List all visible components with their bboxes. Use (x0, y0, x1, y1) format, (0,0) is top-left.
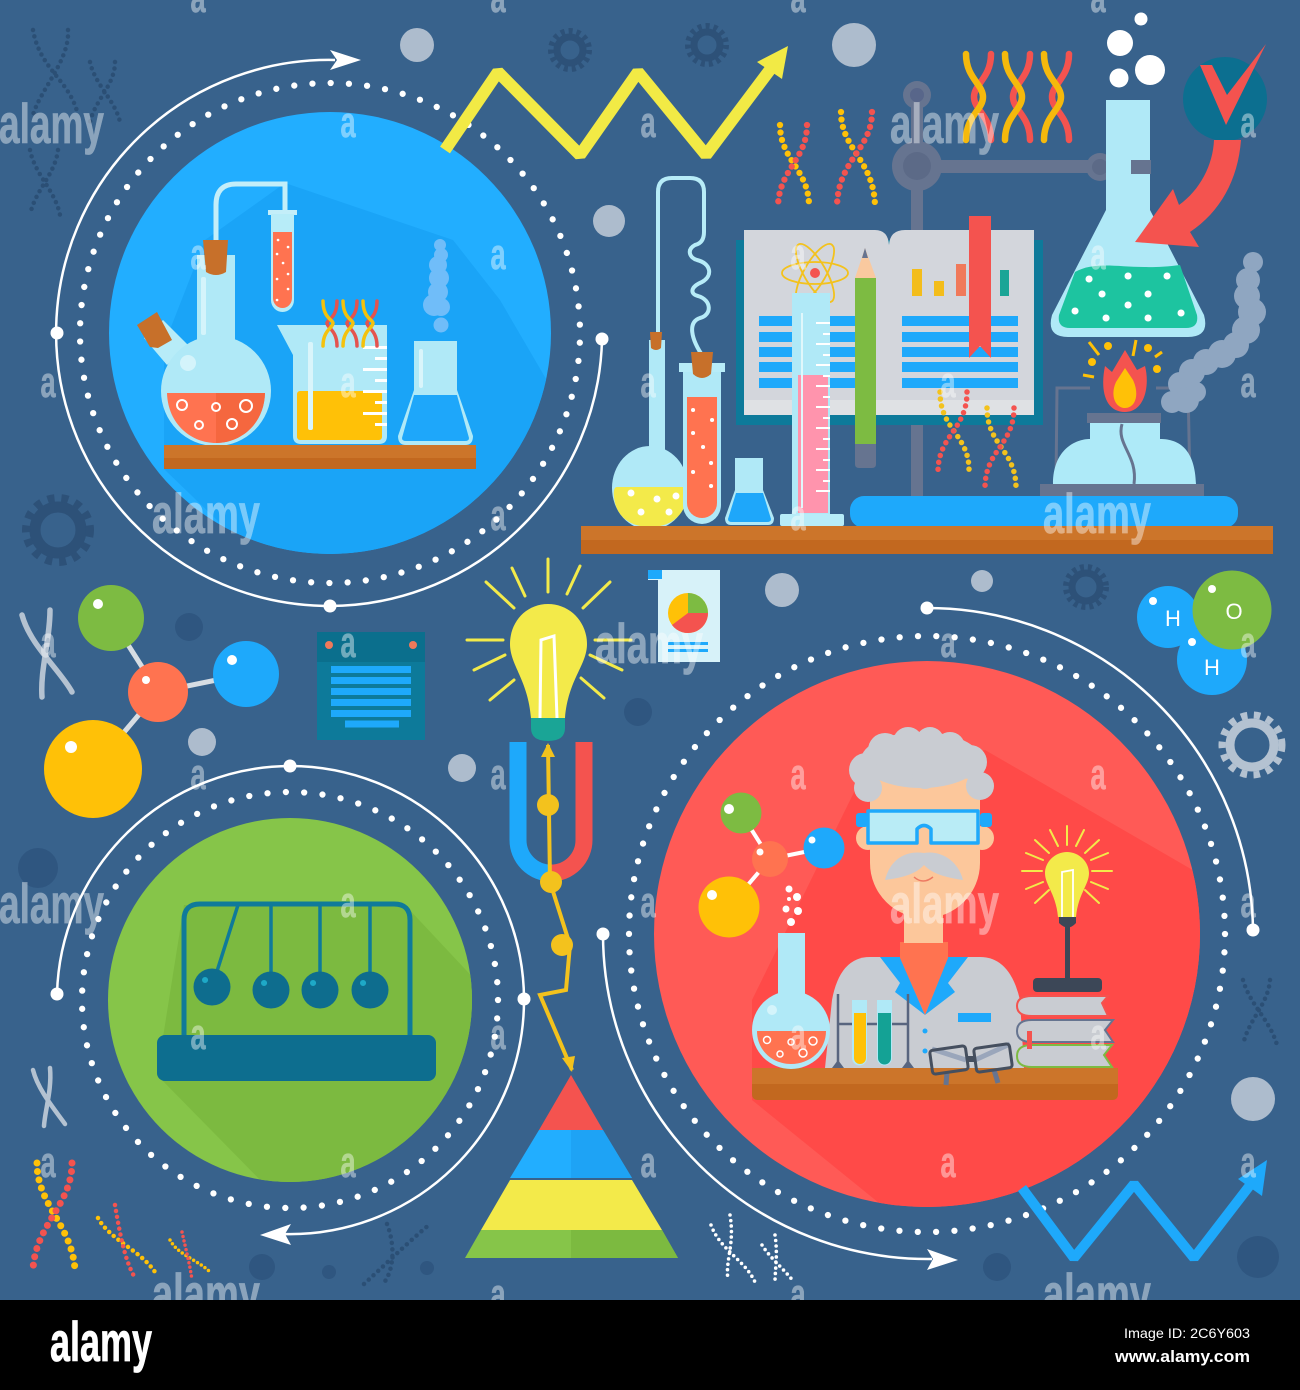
large watermarks: alamy (152, 1262, 260, 1325)
large watermarks: alamy (152, 482, 260, 545)
DNA coloured bottom-left (33, 1163, 210, 1280)
website: www.alamy.com (1114, 1347, 1250, 1366)
small watermark letters: aaaaa (40, 1137, 1256, 1187)
molecule (44, 585, 279, 818)
moustache (885, 852, 963, 880)
small watermark letters: aaaa (191, 749, 1106, 799)
small watermark letters: aaa (341, 877, 1256, 927)
DNA coloured top centre (778, 112, 875, 208)
arrowhead (330, 50, 361, 70)
large watermarks: alamy (0, 872, 104, 935)
desk lamp bulb (1022, 826, 1112, 992)
H2O molecule (1137, 570, 1272, 695)
neck (904, 900, 943, 943)
small watermark letters: aaaa (191, 1009, 1106, 1059)
big flask (1051, 100, 1205, 337)
small watermark letters: aaaa (40, 617, 1256, 667)
round flask (752, 886, 830, 1069)
panel: green circle (50, 760, 530, 1245)
test tube (268, 210, 297, 312)
small molecule (698, 792, 844, 938)
hair (849, 727, 994, 802)
small watermark letters: aa (490, 490, 806, 540)
arrowhead (260, 1224, 291, 1245)
long shelf (581, 496, 1273, 554)
page bar chart (912, 264, 1009, 296)
red curved arrow (1135, 140, 1241, 247)
large watermarks (0, 92, 1151, 1325)
footer logo: alamy (50, 1310, 152, 1373)
small flask (725, 458, 774, 525)
large watermarks: alamy (595, 612, 703, 675)
flask with side arm (137, 240, 271, 446)
chromosome ribbons top right (966, 54, 1069, 140)
note board (317, 632, 425, 740)
smoke (423, 239, 450, 332)
desk (752, 1068, 1118, 1100)
stack of books (1017, 996, 1113, 1067)
large watermarks: alamy (1043, 1262, 1151, 1325)
test tube rack (832, 994, 914, 1068)
atom (782, 239, 848, 307)
burner (1040, 388, 1204, 496)
text lines right page (902, 321, 1018, 383)
DNA on book (938, 392, 1016, 488)
tall test tube (679, 352, 725, 524)
bubbles (1107, 12, 1165, 88)
dark gears (26, 26, 1106, 607)
lab coat (825, 957, 1024, 1068)
yellow zigzag arrow (445, 46, 788, 155)
image id: Image ID: 2C6Y603 (1124, 1325, 1250, 1341)
Newton's cradle (157, 904, 436, 1081)
small watermark letters: aaaa (191, 229, 1106, 279)
long neck flask with tube (612, 178, 709, 530)
bookmark (969, 216, 991, 358)
H2O molecule: H (1204, 655, 1220, 680)
blue zigzag arrow (1022, 1160, 1267, 1258)
panel: top-left blue circle with dotted ring and arrow (50, 50, 608, 612)
beaker (277, 301, 387, 444)
light bulb with rays (467, 559, 631, 741)
DNA white dotted bottom (711, 1215, 794, 1282)
glass tube (216, 184, 285, 240)
background dots dark (18, 613, 1279, 1281)
small watermark letters: aaa (341, 97, 1256, 147)
large watermarks: alamy (890, 872, 999, 935)
text lines left page (759, 321, 875, 383)
large watermarks: alamy (1043, 482, 1151, 545)
H2O molecule: O (1225, 599, 1243, 624)
pencil (855, 248, 876, 468)
shelf (164, 445, 476, 469)
check mark badge (1183, 44, 1267, 141)
small watermark letters: aa (490, 1269, 806, 1319)
pyramid (465, 1075, 678, 1258)
panel: red circle scientist (596, 602, 1260, 1270)
arrowhead (927, 1249, 958, 1270)
flame with sparks (1083, 340, 1162, 412)
H2O molecule: H (1165, 606, 1181, 631)
lightning path with nodes (537, 743, 575, 1072)
smoke grey (1161, 252, 1266, 413)
large watermarks: alamy (0, 92, 104, 155)
goggles (868, 811, 978, 843)
large watermarks: alamy (890, 92, 999, 155)
background dots grey (188, 23, 1275, 1121)
open book (736, 216, 1043, 425)
footer band (0, 1300, 1300, 1390)
horseshoe magnet (518, 742, 584, 873)
glasses (930, 1044, 1012, 1085)
face (870, 770, 980, 918)
graduated cylinder (780, 293, 844, 526)
light gear (1222, 715, 1282, 775)
lab stand (892, 81, 1114, 500)
scientist (825, 727, 1024, 1068)
small watermark letters: aaaaa (40, 357, 1256, 407)
chromosomes pale (22, 610, 72, 1126)
erlenmeyer flask (398, 341, 473, 445)
chart card (648, 570, 720, 662)
